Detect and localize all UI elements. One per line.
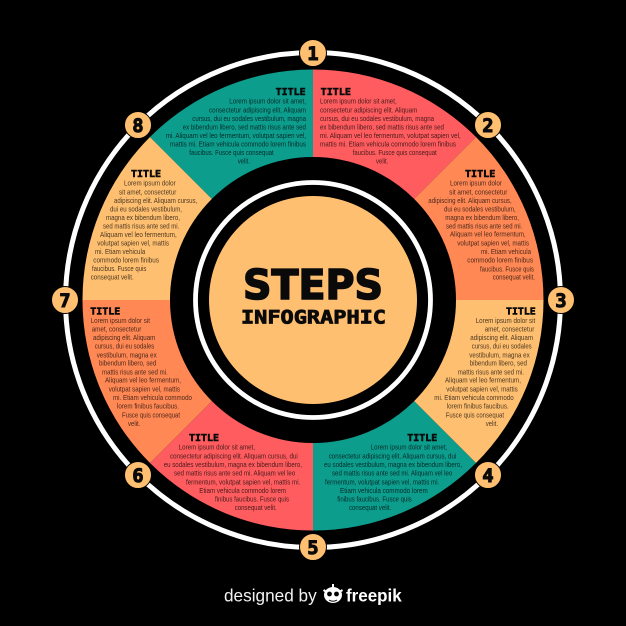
text block: step 1 <box>320 97 461 166</box>
heading: step 4 title: TITLE <box>407 433 438 444</box>
heading: step 5 title: TITLE <box>189 433 219 444</box>
text block: step 8: cursus, dui eu sodales vestibulum, magna <box>192 114 307 123</box>
subtitle: INFOGRAPHIC: INFOGRAPHIC <box>241 308 386 328</box>
text block: step 8: mi. Aliquam vel leo fermentum, volutpat sapien vel, <box>166 131 306 140</box>
heading: step 3 title: TITLE <box>506 306 536 318</box>
text block: step 4: fermentum, volutpat sapien vel, mattis mi. <box>325 477 439 486</box>
text block: step 3: vestibulum, magna ex <box>469 350 530 359</box>
panel: step 1 <box>313 70 476 199</box>
text block: step 8: ex bibendum libero, sed mattis risus ante sed <box>183 122 306 131</box>
text block: step 5: finibus faucibus. Fusce quis <box>215 495 289 504</box>
text block: step 7: commodo lorem finibus <box>93 256 159 265</box>
text block: step 1: mi. Aliquam vel leo fermentum, volutpat sapien vel, <box>320 131 461 140</box>
icon: freepik mascot <box>324 584 342 603</box>
text block: step 3: mattis risus ante sed mi. <box>458 367 524 376</box>
text block: step 7: consequat velit. <box>91 273 134 282</box>
title: STEPS: STEPS <box>243 261 383 309</box>
text block: step 6: volutpat sapien vel, mattis <box>109 384 180 393</box>
text block: step 5: consequat velit. <box>235 503 277 512</box>
footer: freepik credit: designed by <box>224 586 317 606</box>
badge: number 1 <box>300 40 326 66</box>
text block: step 2: magna ex bibendum libero, <box>445 213 519 222</box>
badge: number 5 <box>300 534 326 560</box>
footer: freepik credit: freepik <box>346 586 402 606</box>
text block: step 2: Lorem ipsum dolor <box>450 179 502 188</box>
text block: step 5: Lorem ipsum dolor sit amet, <box>179 443 255 452</box>
text block: step 7: mi. Etiam vehicula <box>95 247 146 256</box>
heading: step 7 title: TITLE <box>131 169 161 180</box>
text block: step 7: Lorem ipsum dolor <box>124 179 176 188</box>
text block: step 2: sed mattis risus ante sed mi. <box>446 221 522 230</box>
panel: step 7 <box>82 137 212 300</box>
text block: step 1: ex bibendum libero, sed mattis risus ante sed <box>320 122 444 131</box>
text block: step 6: Fusce quis consequat <box>122 410 180 419</box>
text block: step 7: faucibus. Fusce quis <box>92 264 147 273</box>
badge: number 3 <box>548 286 574 314</box>
text block: step 7 <box>91 179 197 282</box>
text block: step 2: dui eu sodales vestibulum, <box>444 204 516 213</box>
text block: step 3: cursus, dui eu sodales <box>472 342 532 351</box>
text block: step 4: sed mattis risus ante sed mi. Aliquam vel leo <box>332 469 452 478</box>
inner white ring <box>196 182 430 418</box>
badge: number 4: 4 <box>482 466 494 487</box>
panel: step 2 <box>414 137 544 300</box>
text block: step 4: finibus faucibus. Fusce quis <box>337 495 412 504</box>
text block: step 8: Lorem ipsum dolor sit amet, <box>229 97 306 106</box>
text block: step 5: Etiam vehicula commodo lorem <box>199 486 286 495</box>
text block: step 6: adipiscing elit. Aliquam <box>93 333 155 342</box>
badge: number 7 <box>52 286 78 314</box>
text block: step 1: mattis mi. Etiam vehicula commodo lorem finibus <box>320 139 456 148</box>
badge: number 6 <box>124 462 152 488</box>
badge: number 3: 3 <box>555 291 567 312</box>
heading: step 8 title: TITLE <box>276 87 306 98</box>
text block: step 4: Etiam vehicula commodo lorem <box>340 486 428 495</box>
badge: number 8 <box>124 112 152 138</box>
center circle with title <box>209 196 417 404</box>
text block: step 2: consequat velit. <box>493 273 535 282</box>
text block: step 3: Fusce quis consequat <box>446 410 504 419</box>
badge: number 1: 1 <box>307 44 319 65</box>
text block: step 4: Lorem ipsum dolor sit amet, <box>371 443 447 452</box>
text block: step 7: sit amet, consectetur <box>119 187 177 196</box>
text block: step 6: vestibulum, magna ex <box>97 350 157 359</box>
text block: step 2: sit amet, consectetur <box>449 187 508 196</box>
text block: step 4: eu sodales vestibulum, magna ex bibendum libero, <box>324 460 462 469</box>
text block: step 4: consequat velit. <box>349 503 391 512</box>
text block: step 2: mi. Etiam vehicula <box>481 247 532 256</box>
text block: step 7: magna ex bibendum libero, <box>106 213 180 222</box>
text block: step 1: cursus, dui eu sodales vestibulum, magna <box>320 114 435 123</box>
text block: step 2: adipiscing elit. Aliquam cursus, <box>428 196 512 205</box>
panel: step 5 <box>150 401 313 530</box>
text block: step 8: faucibus. Fusce quis consequat <box>189 148 274 157</box>
text block: step 4: consectetur adipiscing elit. Aliquam cursus, dui <box>329 451 457 460</box>
text block: step 3: amet, consectetur <box>485 325 535 334</box>
text block: step 2: Aliquam vel leo fermentum, <box>450 230 526 239</box>
text block: step 8 <box>166 97 307 166</box>
text block: step 2: volutpat sapien vel, mattis <box>457 238 529 247</box>
footer: freepik credit <box>224 584 402 606</box>
text block: step 6: velit. <box>128 419 140 428</box>
panel: step 4 <box>313 401 476 530</box>
text block: step 7: Aliquam vel leo fermentum, <box>100 230 177 239</box>
text block: step 6: lorem finibus faucibus. <box>117 402 179 411</box>
text block: step 6: mi. Etiam vehicula commodo <box>113 393 192 402</box>
text block: step 3: lorem finibus faucibus. <box>447 402 509 411</box>
badge: number 4 <box>474 462 502 488</box>
text block: step 8: velit. <box>238 157 250 166</box>
badge: number 5: 5 <box>307 538 319 559</box>
text block: step 5: sed mattis risus ante sed mi. Aliquam vel leo <box>174 469 295 478</box>
text block: step 3: adipiscing elit. Aliquam <box>470 333 533 342</box>
text block: step 2 <box>428 179 535 282</box>
text block: step 6: Aliquam vel leo fermentum, <box>105 376 181 385</box>
text block: step 2: commodo lorem finibus <box>467 256 533 265</box>
text block: step 6: Lorem ipsum dolor sit <box>91 316 150 325</box>
text block: step 7: volutpat sapien vel, mattis <box>97 239 169 248</box>
heading: step 2 title: TITLE <box>465 169 496 180</box>
text block: step 6: mattis risus ante sed mi. <box>102 367 168 376</box>
text block: step 6 <box>91 316 192 428</box>
text block: step 1: Lorem ipsum dolor sit amet, <box>320 97 397 106</box>
text block: step 7: adipiscing elit. Aliquam cursus, <box>114 196 197 205</box>
badge: number 2 <box>474 112 502 138</box>
text block: step 5: eu sodales vestibulum, magna ex bibendum libero, <box>164 460 302 469</box>
badge: number 6: 6 <box>132 466 144 487</box>
text block: step 5 <box>164 443 302 512</box>
text block: step 2: faucibus. Fusce quis <box>480 264 534 273</box>
badge: number 7: 7 <box>59 291 71 312</box>
text block: step 7: dui eu sodales vestibulum, <box>110 204 182 213</box>
badge: number 2: 2 <box>482 116 494 137</box>
text block: step 1: velit. <box>376 157 388 166</box>
text block: step 3: Lorem ipsum dolor sit <box>476 316 535 325</box>
panel: step 3 <box>414 300 544 463</box>
heading: step 1 title: TITLE <box>321 87 351 98</box>
text block: step 6: amet, consectetur <box>92 325 142 334</box>
text block: step 7: sed mattis risus ante sed mi. <box>103 221 179 230</box>
panel: step 8 <box>150 70 313 199</box>
text block: step 8: mattis mi. Etiam vehicula commodo lorem finibus <box>170 139 306 148</box>
text block: step 1: consectetur adipiscing elit. Aliquam <box>320 105 417 114</box>
text block: step 3 <box>434 316 535 428</box>
text block: step 3: bibendum libero, sed <box>470 359 527 368</box>
text block: step 3: mi. Etiam vehicula commodo <box>434 393 514 402</box>
text block: step 3: Aliquam vel leo fermentum, <box>445 376 521 385</box>
text block: step 8: consectetur adipiscing elit. Aliquam <box>209 105 306 114</box>
text block: step 4 <box>324 443 462 512</box>
text block: step 5: consectetur adipiscing elit. Aliquam cursus, dui <box>170 451 298 460</box>
text block: step 3: volutpat sapien vel, mattis <box>446 384 518 393</box>
text block: step 1: faucibus. Fusce quis consequat <box>353 148 437 157</box>
text block: step 5: fermentum, volutpat sapien vel, mattis mi. <box>186 477 300 486</box>
text block: step 6: bibendum libero, sed <box>99 359 156 368</box>
outer white ring <box>66 52 560 548</box>
text block: step 3: velit. <box>486 419 498 428</box>
badge: number 8: 8 <box>132 116 144 137</box>
heading: step 6 title: TITLE <box>90 306 121 318</box>
panel: step 6 <box>82 300 212 463</box>
text block: step 6: cursus, dui eu sodales <box>95 342 155 351</box>
